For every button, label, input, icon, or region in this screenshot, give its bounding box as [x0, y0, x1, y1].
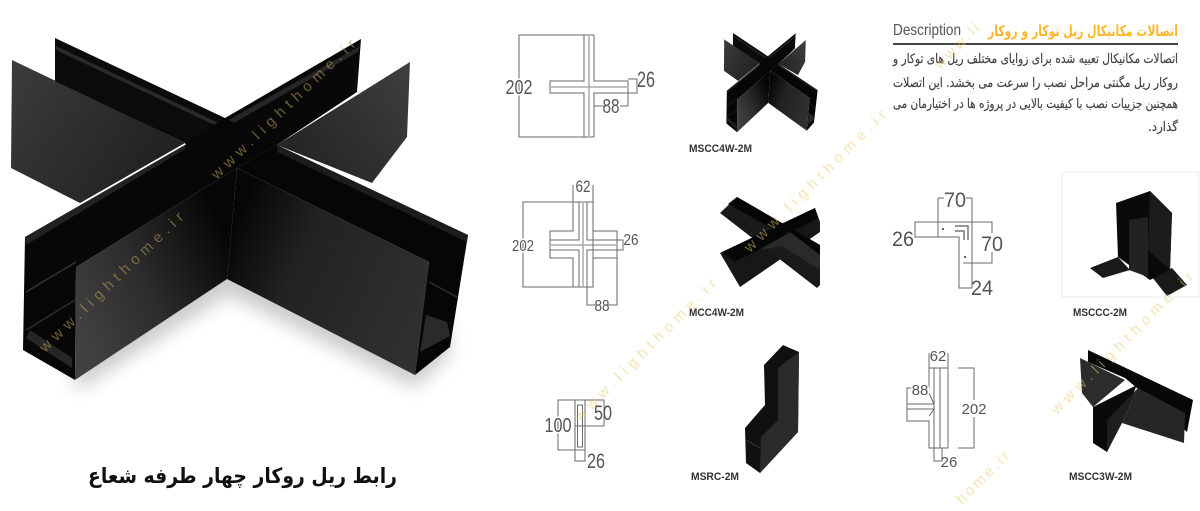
label: MSRC-2M: MSRC-2M [691, 471, 739, 483]
description text block [892, 52, 1179, 135]
dimension drawing: MCC4W [512, 177, 639, 315]
label: MSCC4W-2M: MSCC4W-2M [689, 143, 752, 155]
watermark on white area [570, 18, 1199, 508]
label: MCC4W-2M: MCC4W-2M [689, 307, 744, 319]
description heading: Description [893, 22, 961, 39]
watermark on white area: www.li [930, 18, 986, 74]
product: MCC4W small [689, 197, 820, 319]
front-right rail [237, 145, 468, 375]
watermark on product: www.lighthome.ir [207, 34, 361, 184]
watermark on white area: www.lighthome.ir [1047, 267, 1199, 419]
dimension drawing: MSRC [544, 400, 612, 473]
label: MSCCC-2M: MSCCC-2M [1073, 307, 1127, 319]
watermark on product: www.lighthome.ir [35, 207, 189, 357]
dimension drawing: MSCC3W: 202 [961, 401, 987, 418]
product: MSCC4W small [689, 33, 818, 155]
dimension drawing: MSCC4W [506, 35, 655, 137]
back-left panel [11, 60, 185, 203]
product: MSCCC in framed box [1062, 172, 1199, 319]
dimension drawing: MSRC: 26 [587, 450, 605, 473]
product title: رابط ریل روکار چهار طرفه شعاع [88, 464, 397, 488]
dimension drawing: MSCCC: 70 [981, 233, 1003, 256]
connector body [11, 38, 468, 380]
dimension drawing: MSCC3W: 88 [912, 382, 928, 399]
watermark on white area: home.ir [953, 446, 1015, 508]
dimension drawing: MSCC3W: 62 [930, 348, 946, 365]
dimension drawing: MSCCC: 24 [971, 277, 993, 300]
dimension drawing: MSCCC [892, 189, 1003, 300]
dimension drawing: MSRC: 100 [544, 415, 572, 437]
front-right panel [227, 168, 429, 375]
back-right panel [277, 62, 410, 183]
product: MSCC3W small [1069, 350, 1193, 483]
dimension drawing: MSCC4W: 202 [506, 77, 532, 99]
dimension drawing: MSCCC: 26 [892, 228, 914, 251]
dimension drawing: MSCC4W: 26 [637, 67, 655, 92]
product photo: four-way surface rail connector [11, 34, 468, 392]
dimension drawing: MCC4W: 88 [594, 298, 610, 315]
description text block: گذارد. [1148, 119, 1179, 135]
fin [1129, 217, 1148, 277]
back rail right arm [225, 39, 361, 168]
product: MSRC small [691, 345, 799, 483]
dimension drawing: MSCC3W [907, 348, 987, 471]
watermark on white area: www.lighthome.ir [570, 274, 722, 426]
description heading [893, 22, 1178, 45]
dimension drawing: MSCCC: 70 [944, 189, 966, 212]
dimension drawing: MSCC3W: 26 [941, 454, 957, 471]
centre cavity [185, 118, 277, 190]
watermark on white area: www.lighthome.ir [740, 105, 892, 257]
foot right [1152, 268, 1187, 296]
back wall [1116, 191, 1172, 280]
dimension drawing: MSCC4W: 88 [602, 96, 620, 118]
front-left rail [23, 145, 237, 380]
dimension drawing: MSRC: 50 [594, 402, 612, 425]
label: MSCC3W-2M: MSCC3W-2M [1069, 471, 1132, 483]
back rail left arm [55, 38, 237, 168]
foot left [1090, 257, 1130, 278]
dimension drawing: MCC4W: 26 [624, 232, 639, 249]
watermark on product [35, 34, 361, 357]
front-left panel [75, 168, 237, 380]
dimension drawing: MCC4W: 202 [512, 238, 534, 255]
dimension drawing: MCC4W: 62 [576, 177, 590, 196]
